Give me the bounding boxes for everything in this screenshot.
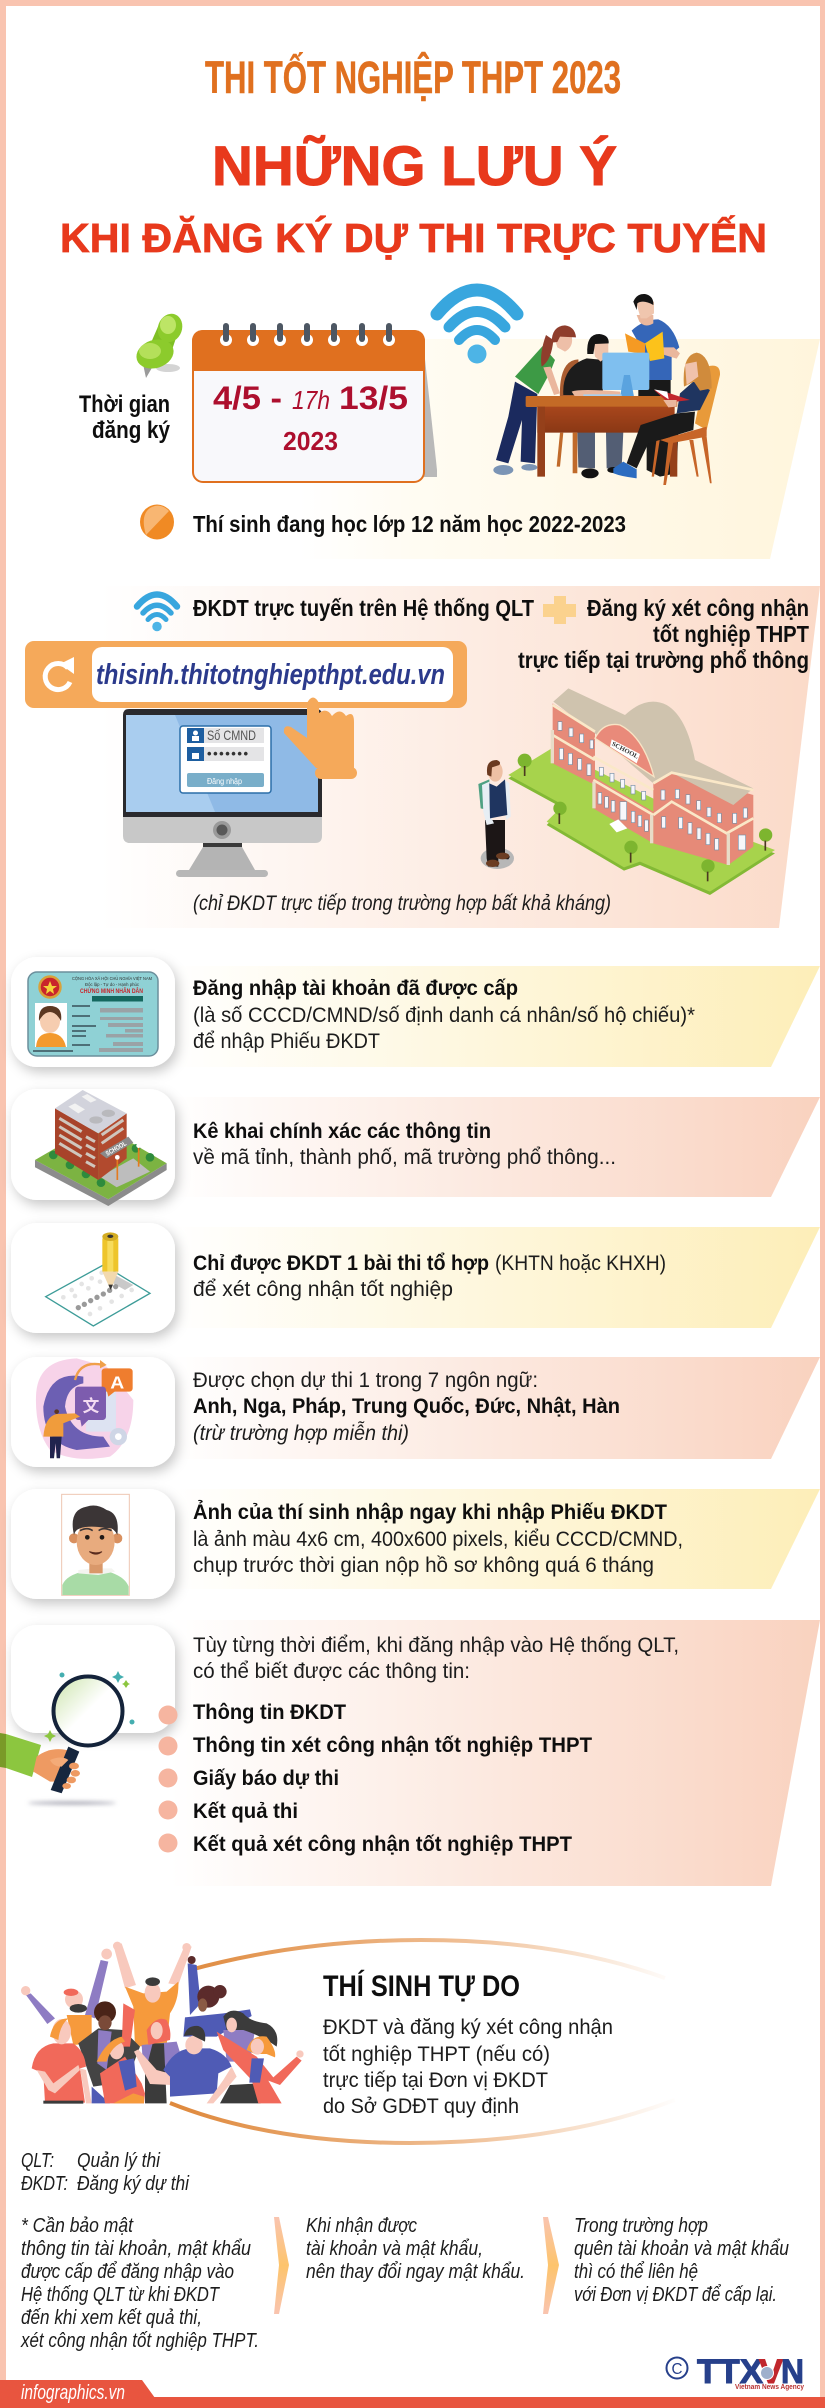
text: log in: để nhập Phiếu ĐKDT bbox=[193, 1030, 380, 1053]
url text: thisinh.thitotnghiepthpt.edu.vn bbox=[96, 659, 445, 691]
text: online registration: ĐKDT trực tuyến trên Hệ thống QLT bbox=[193, 595, 534, 621]
text: candidate photo bbox=[193, 1501, 683, 1577]
calendar dates: 13/5 bbox=[339, 380, 408, 416]
text: independent candidates: trực tiếp tại Đơn vị ĐKDT bbox=[323, 2069, 548, 2092]
title line 2: NHỮNG LƯU Ý bbox=[212, 134, 617, 197]
icon: green push pin bbox=[133, 310, 186, 378]
text: information intro: có thể biết được các thông tin: bbox=[193, 1660, 470, 1683]
text: independent candidates: THÍ SINH TỰ DO bbox=[323, 1969, 520, 2003]
arrow: chevron 2 bbox=[543, 2217, 559, 2314]
legend: abbreviations: QLT: bbox=[21, 2150, 54, 2172]
panel: choose language bbox=[11, 1357, 820, 1467]
note: change password: tài khoản và mật khẩu, bbox=[306, 2238, 483, 2260]
label: registration time: Thời gian bbox=[79, 391, 170, 418]
icon: school building bbox=[35, 1090, 167, 1206]
label: registration time bbox=[79, 391, 171, 444]
lens outline: independent candidates bbox=[170, 1940, 675, 2143]
icon: pointing hand bbox=[284, 698, 357, 779]
panel: declare information bbox=[11, 1089, 820, 1206]
icon: school building: SCHOOL bbox=[105, 1140, 128, 1158]
calendar dates: 4/5 - bbox=[213, 380, 282, 416]
calendar dates bbox=[213, 380, 408, 456]
panel: candidate photo bbox=[11, 1489, 820, 1599]
list: information items: Kết quả thi bbox=[193, 1800, 298, 1823]
text: candidates: Thí sinh đang học lớp 12 năm học 2022-2023 bbox=[193, 511, 626, 537]
icon: ID card: Độc lập - Tự do - Hạnh phúc bbox=[85, 982, 140, 987]
calendar dates: 17h bbox=[292, 385, 330, 415]
icon: ID card: CỘNG HÒA XÃ HỘI CHỦ NGHĨA VIỆT NAM bbox=[72, 974, 152, 981]
icon: portrait photo bbox=[62, 1494, 129, 1595]
icon: small wifi bbox=[137, 594, 177, 631]
icon: translation bbox=[36, 1358, 133, 1459]
note: keep account secure: thông tin tài khoản, mật khẩu bbox=[21, 2238, 251, 2260]
logo: TTXVN: V bbox=[759, 2353, 783, 2391]
text: one combined exam: Chỉ được ĐKDT 1 bài thi tổ hợp bbox=[193, 1252, 489, 1275]
login form bbox=[180, 726, 271, 793]
title bbox=[60, 52, 767, 261]
text: choose language: (trừ trường hợp miễn thi) bbox=[193, 1422, 409, 1445]
text: declare information: Kê khai chính xác các thông tin bbox=[193, 1120, 491, 1143]
list: information items: Giấy báo dự thi bbox=[193, 1767, 339, 1790]
text: one combined exam: (KHTN hoặc KHXH) bbox=[495, 1252, 666, 1275]
arrow: chevron 1 bbox=[274, 2217, 289, 2314]
note: keep account secure: xét công nhận tốt nghiệp THPT. bbox=[20, 2330, 259, 2352]
legend: abbreviations: ĐKDT: bbox=[21, 2173, 68, 2195]
logo: TTXVN: C bbox=[672, 2361, 682, 2378]
text: log in: (là số CCCD/CMND/số định danh cá nhân/số hộ chiếu)* bbox=[193, 1004, 695, 1027]
list: information items: Thông tin ĐKDT bbox=[193, 1701, 346, 1724]
footer band bbox=[0, 2380, 825, 2408]
text: log in bbox=[193, 977, 695, 1053]
note: forgotten password: thì có thể liên hệ bbox=[574, 2261, 698, 2283]
legend: abbreviations bbox=[21, 2150, 189, 2195]
text: independent candidates: ĐKDT và đăng ký xét công nhận bbox=[323, 2016, 613, 2039]
text: independent candidates: tốt nghiệp THPT (nếu có) bbox=[323, 2043, 550, 2066]
panel: one combined exam bbox=[11, 1223, 820, 1333]
logo: TTXVN bbox=[666, 2353, 805, 2391]
bullet: orange dot bbox=[140, 504, 174, 540]
icon: translation: A bbox=[110, 1372, 124, 1392]
text: candidate photo: là ảnh màu 4x6 cm, 400x600 pixels, kiểu CCCD/CMND, bbox=[193, 1528, 683, 1551]
login form: ••••••• bbox=[207, 746, 248, 761]
text: information intro bbox=[193, 1634, 679, 1683]
calendar dates: 2023 bbox=[283, 426, 338, 456]
text: candidate photo: Ảnh của thí sinh nhập ngay khi nhập Phiếu ĐKDT bbox=[193, 1501, 667, 1524]
text: declare information: về mã tỉnh, thành phố, mã trường phổ thông... bbox=[193, 1146, 616, 1169]
text: graduation recognition bbox=[518, 595, 809, 673]
title line 3: KHI ĐĂNG KÝ DỰ THI TRỰC TUYẾN bbox=[60, 215, 767, 261]
text: one combined exam: để xét công nhận tốt nghiệp bbox=[193, 1278, 453, 1301]
logo: TTXVN: Vietnam News Agency bbox=[735, 2382, 805, 2391]
note: forgotten password: quên tài khoản và mật khẩu bbox=[574, 2238, 789, 2260]
label: registration time: đăng ký bbox=[92, 417, 171, 444]
icon: calendar bbox=[192, 323, 437, 482]
icon: ID card: CHỨNG MINH NHÂN DÂN bbox=[80, 986, 143, 995]
panel: information available bbox=[0, 1620, 820, 1886]
note: forgotten password bbox=[574, 2215, 789, 2306]
note: forgotten password: với Đơn vị ĐKDT để cấp lại. bbox=[574, 2284, 777, 2306]
list: information items: Thông tin xét công nhận tốt nghiệp THPT bbox=[193, 1734, 592, 1757]
text: candidate photo: chụp trước thời gian nộp hồ sơ không quá 6 tháng bbox=[193, 1554, 654, 1577]
note: change password: Khi nhận được bbox=[306, 2215, 417, 2237]
logo: TTXVN: TTX bbox=[697, 2353, 763, 2391]
icon: translation: 文 bbox=[83, 1393, 100, 1417]
note: forgotten password: Trong trường hợp bbox=[574, 2215, 708, 2237]
note: keep account secure: * Cần bảo mật bbox=[21, 2215, 134, 2237]
note: change password bbox=[306, 2215, 525, 2283]
text: choose language: Được chọn dự thi 1 trong 7 ngôn ngữ: bbox=[193, 1369, 538, 1392]
icon: ID card bbox=[28, 972, 158, 1056]
illustration: school bbox=[508, 688, 775, 895]
note: keep account secure bbox=[20, 2215, 259, 2352]
note: force majeure: (chỉ ĐKDT trực tiếp trong trường hợp bất khả kháng) bbox=[193, 892, 611, 915]
note: keep account secure: được cấp để đăng nhập vào bbox=[21, 2261, 234, 2283]
icon: magnifying glass in hand bbox=[0, 1671, 134, 1804]
note: keep account secure: đến khi xem kết quả thi, bbox=[21, 2307, 202, 2329]
legend: abbreviations: Quản lý thi bbox=[77, 2150, 160, 2172]
icon: plus bbox=[543, 596, 576, 624]
list: information items bbox=[158, 1701, 592, 1856]
note: keep account secure: Hệ thống QLT từ khi ĐKDT bbox=[21, 2284, 220, 2306]
illustration: students around a table bbox=[493, 294, 720, 485]
title line 1: THI TỐT NGHIỆP THPT 2023 bbox=[205, 52, 621, 103]
panel: registration time background bbox=[300, 339, 820, 559]
text: choose language bbox=[193, 1369, 620, 1445]
footer text: infographics.vn bbox=[21, 2382, 125, 2404]
url bar bbox=[25, 641, 467, 708]
legend: abbreviations: Đăng ký dự thi bbox=[77, 2173, 189, 2195]
text: choose language: Anh, Nga, Pháp, Trung Quốc, Đức, Nhật, Hàn bbox=[193, 1395, 620, 1418]
text: one combined exam bbox=[193, 1252, 666, 1301]
panel: registration method bbox=[25, 586, 820, 928]
illustration: student bbox=[478, 760, 514, 869]
icon: pencil on answer sheet bbox=[46, 1232, 150, 1326]
panel: log in bbox=[11, 957, 820, 1067]
icon: computer monitor bbox=[123, 709, 322, 877]
icon: wifi bbox=[437, 290, 517, 364]
list: information items: Kết quả xét công nhận tốt nghiệp THPT bbox=[193, 1833, 572, 1856]
text: log in: Đăng nhập tài khoản đã được cấp bbox=[193, 977, 518, 1000]
login form: Đăng nhập bbox=[207, 776, 242, 786]
text: information intro: Tùy từng thời điểm, khi đăng nhập vào Hệ thống QLT, bbox=[193, 1634, 679, 1657]
text: declare information bbox=[193, 1120, 616, 1169]
text: independent candidates bbox=[323, 1969, 613, 2118]
icon: reload bbox=[45, 657, 74, 690]
illustration: school: SCHOOL bbox=[610, 741, 640, 761]
login form: Số CMND bbox=[207, 727, 256, 743]
illustration: crowd bbox=[21, 1942, 304, 2104]
note: change password: nên thay đổi ngay mật khẩu. bbox=[306, 2261, 525, 2283]
logo: TTXVN: N bbox=[781, 2353, 804, 2391]
text: independent candidates: do Sở GDĐT quy định bbox=[323, 2095, 519, 2118]
